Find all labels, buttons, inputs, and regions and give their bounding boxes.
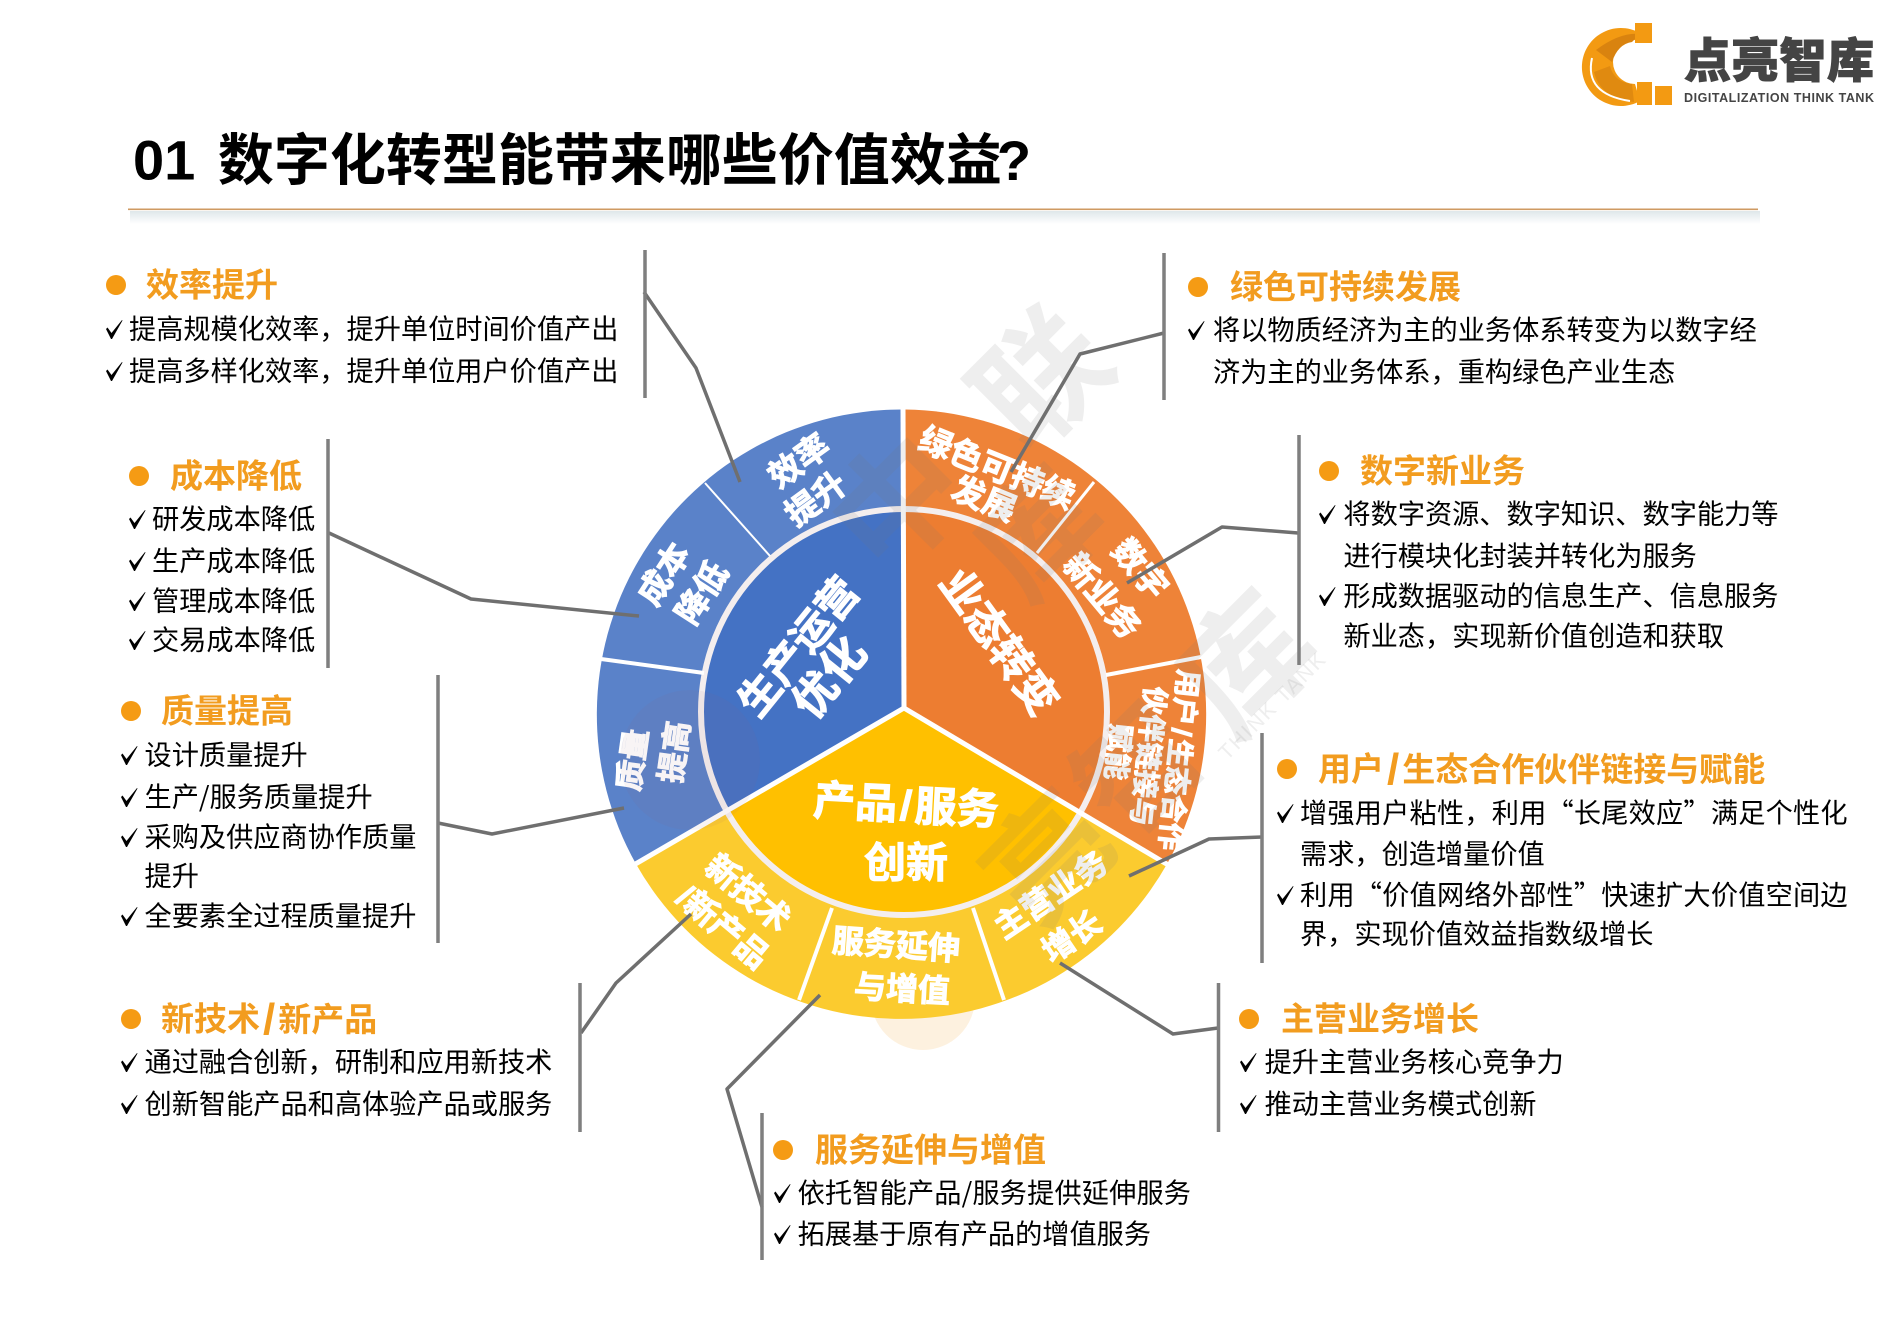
label: 数字新业务: 新业务: [1056, 546, 1148, 646]
label: 数字新业务: [1056, 532, 1175, 646]
logo: [1582, 23, 1874, 106]
label: 主营业务增长: 主营业务: [988, 844, 1114, 946]
title rule: [128, 208, 1760, 224]
panel: 数字新业务: 将数字资源、数字知识、数字能力等: [1343, 498, 1778, 530]
panel: 服务延伸与增值: 拓展基于原有产品的增值服务: [798, 1218, 1151, 1250]
panel: 成本降低: 成本降低: [170, 458, 302, 494]
label: 成本降低: 成本: [631, 536, 697, 612]
icon: logo C mark: [1582, 23, 1672, 106]
label: 生产运营优化: 优化: [783, 628, 877, 728]
panel: 数字新业务: 新业态，实现新价值创造和获取: [1343, 620, 1724, 652]
panel: 主营业务增长: [1218, 983, 1564, 1132]
label: 用户/生态合作伙伴链接与赋能: [1100, 668, 1204, 852]
inner wedge: yellow: [730, 708, 1078, 913]
label: 质量提高: 质量: [611, 727, 655, 793]
label: 数字新业务: 数字: [1105, 532, 1175, 606]
panel: 数字新业务: 形成数据驱动的信息生产、信息服务: [1343, 580, 1778, 612]
panel: 用户/生态合作伙伴链接与赋能: 增强用户粘性，利用“长尾效应”满足个性化: [1300, 790, 1848, 830]
panel: 绿色可持续发展: [1164, 253, 1757, 400]
panel: 绿色可持续发展: 济为主的业务体系，重构绿色产业生态: [1213, 356, 1675, 388]
panel: 质量提高: 全要素全过程质量提升: [144, 900, 416, 932]
panel: 主营业务增长: 主营业务增长: [1281, 1000, 1479, 1038]
outer ring: yellow sectors: [636, 708, 1167, 1019]
watermark: 联: [948, 284, 1140, 476]
label: 服务延伸与增值: 服务延伸: [831, 923, 961, 967]
panel: 效率提升: 提高多样化效率，提升单位用户价值产出: [129, 356, 618, 386]
label: 成本降低: 降低: [669, 555, 735, 631]
panel: 新技术/新产品: 通过融合创新，研制和应用新技术: [144, 1046, 552, 1078]
label: 效率提升: 提升: [778, 465, 854, 533]
panel: 成本降低: 生产成本降低: [152, 546, 315, 576]
logo tagline: DIGITALIZATION THINK TANK: [1684, 91, 1874, 105]
panel: 质量提高: 设计质量提升: [144, 740, 308, 770]
watermark: 库: [1149, 567, 1345, 763]
radial diagram: [597, 408, 1206, 1019]
label: 效率提升: [761, 427, 854, 533]
label: 用户/生态合作伙伴链接与赋能: 赋能: [1100, 723, 1136, 781]
label: 主营业务增长: 增长: [1035, 904, 1109, 970]
panel: 新技术/新产品: 新技术/新产品: [161, 994, 377, 1044]
watermark: 库: [950, 445, 1130, 625]
panel: 成本降低: 研发成本降低: [152, 504, 315, 534]
panel: 服务延伸与增值: 依托智能产品/服务提供延伸服务: [798, 1170, 1191, 1210]
panel: 成本降低: [129, 439, 328, 668]
panel: 质量提高: 质量提高: [161, 692, 293, 730]
panel: 服务延伸与增值: 服务延伸与增值: [815, 1132, 1046, 1168]
panel: 质量提高: 生产/服务质量提升: [144, 774, 373, 814]
panel: 用户/生态合作伙伴链接与赋能: 需求，创造增量价值: [1300, 838, 1545, 870]
label: 业态转变: 业态转变: [931, 560, 1067, 724]
label: 绿色可持续发展: 发展: [946, 469, 1022, 529]
label: 生产运营优化: 生产运营: [730, 569, 868, 725]
panel: 数字新业务: 数字新业务: [1360, 452, 1525, 490]
label: 质量提高: [611, 719, 697, 793]
panel: 效率提升: [106, 250, 645, 398]
label: 用户/生态合作伙伴链接与赋能: 伙伴链接与: [1125, 685, 1171, 827]
panel: 成本降低: 管理成本降低: [152, 586, 315, 616]
panel: 新技术/新产品: 创新智能产品和高体验产品或服务: [144, 1088, 552, 1120]
panel: 质量提高: 提升: [144, 860, 199, 892]
watermark: 智: [1050, 680, 1230, 860]
panel: 用户/生态合作伙伴链接与赋能: [1262, 733, 1848, 963]
panel: 绿色可持续发展: 将以物质经济为主的业务体系转变为以数字经: [1213, 314, 1757, 346]
label: 新技术/新产品: [670, 847, 798, 976]
panel: 质量提高: 采购及供应商协作质量: [144, 822, 416, 852]
label: 产品/服务创新: 产品/服务: [812, 777, 1000, 833]
label: 产品/服务创新: [812, 777, 1000, 886]
label: 产品/服务创新: 创新: [864, 840, 948, 886]
panel: 数字新业务: 进行模块化封装并转化为服务: [1343, 540, 1697, 572]
watermark: faint circle below diagram: [871, 946, 975, 1050]
panel: 质量提高: [121, 675, 438, 943]
title: 01 数字化转型能带来哪些价值效益?: [133, 128, 1031, 192]
logo name: 点亮智库: [1684, 34, 1874, 88]
panel: 主营业务增长: 推动主营业务模式创新: [1265, 1088, 1536, 1120]
label: 效率提升: 效率: [761, 427, 837, 495]
panel: 用户/生态合作伙伴链接与赋能: 用户/生态合作伙伴链接与赋能: [1318, 744, 1765, 794]
label: 成本降低: [631, 536, 735, 631]
outer ring: blue sectors: [597, 409, 904, 864]
panel: 效率提升: 提高规模化效率，提升单位时间价值产出: [129, 314, 618, 344]
label: 质量提高: 提高: [653, 719, 697, 785]
panel: 新技术/新产品: [121, 983, 580, 1132]
watermark: THINK TANK: [1214, 647, 1332, 765]
panel: 效率提升: 效率提升: [146, 266, 278, 304]
watermark: 亮: [960, 770, 1140, 950]
watermark: [620, 284, 1345, 950]
label: 新技术/新产品: /新产品: [670, 878, 776, 976]
panel: 数字新业务: [1299, 435, 1778, 665]
panel: 绿色可持续发展: 绿色可持续发展: [1230, 268, 1461, 306]
outer ring: orange sectors: [904, 410, 1206, 864]
inner wedge: orange: [904, 512, 1105, 812]
panel: 用户/生态合作伙伴链接与赋能: 界，实现价值效益指数级增长: [1300, 918, 1653, 950]
panel: 用户/生态合作伙伴链接与赋能: 利用“价值网络外部性”快速扩大价值空间边: [1300, 872, 1848, 912]
label: 新技术/新产品: 新技术: [698, 847, 798, 939]
label: 服务延伸与增值: 与增值: [853, 969, 951, 1009]
panel: 成本降低: 交易成本降低: [152, 624, 315, 656]
label: 服务延伸与增值: [831, 923, 961, 1009]
leader lines: [329, 292, 1298, 1207]
label: 绿色可持续发展: 绿色可持续: [914, 420, 1080, 516]
label: 用户/生态合作伙伴链接与赋能: 用户 / 生态合作: [1154, 668, 1204, 852]
panel: 服务延伸与增值: [762, 1113, 1191, 1260]
watermark: 中: [804, 409, 996, 601]
inner wedge: blue: [703, 512, 904, 812]
panel: 主营业务增长: 提升主营业务核心竞争力: [1265, 1046, 1564, 1078]
